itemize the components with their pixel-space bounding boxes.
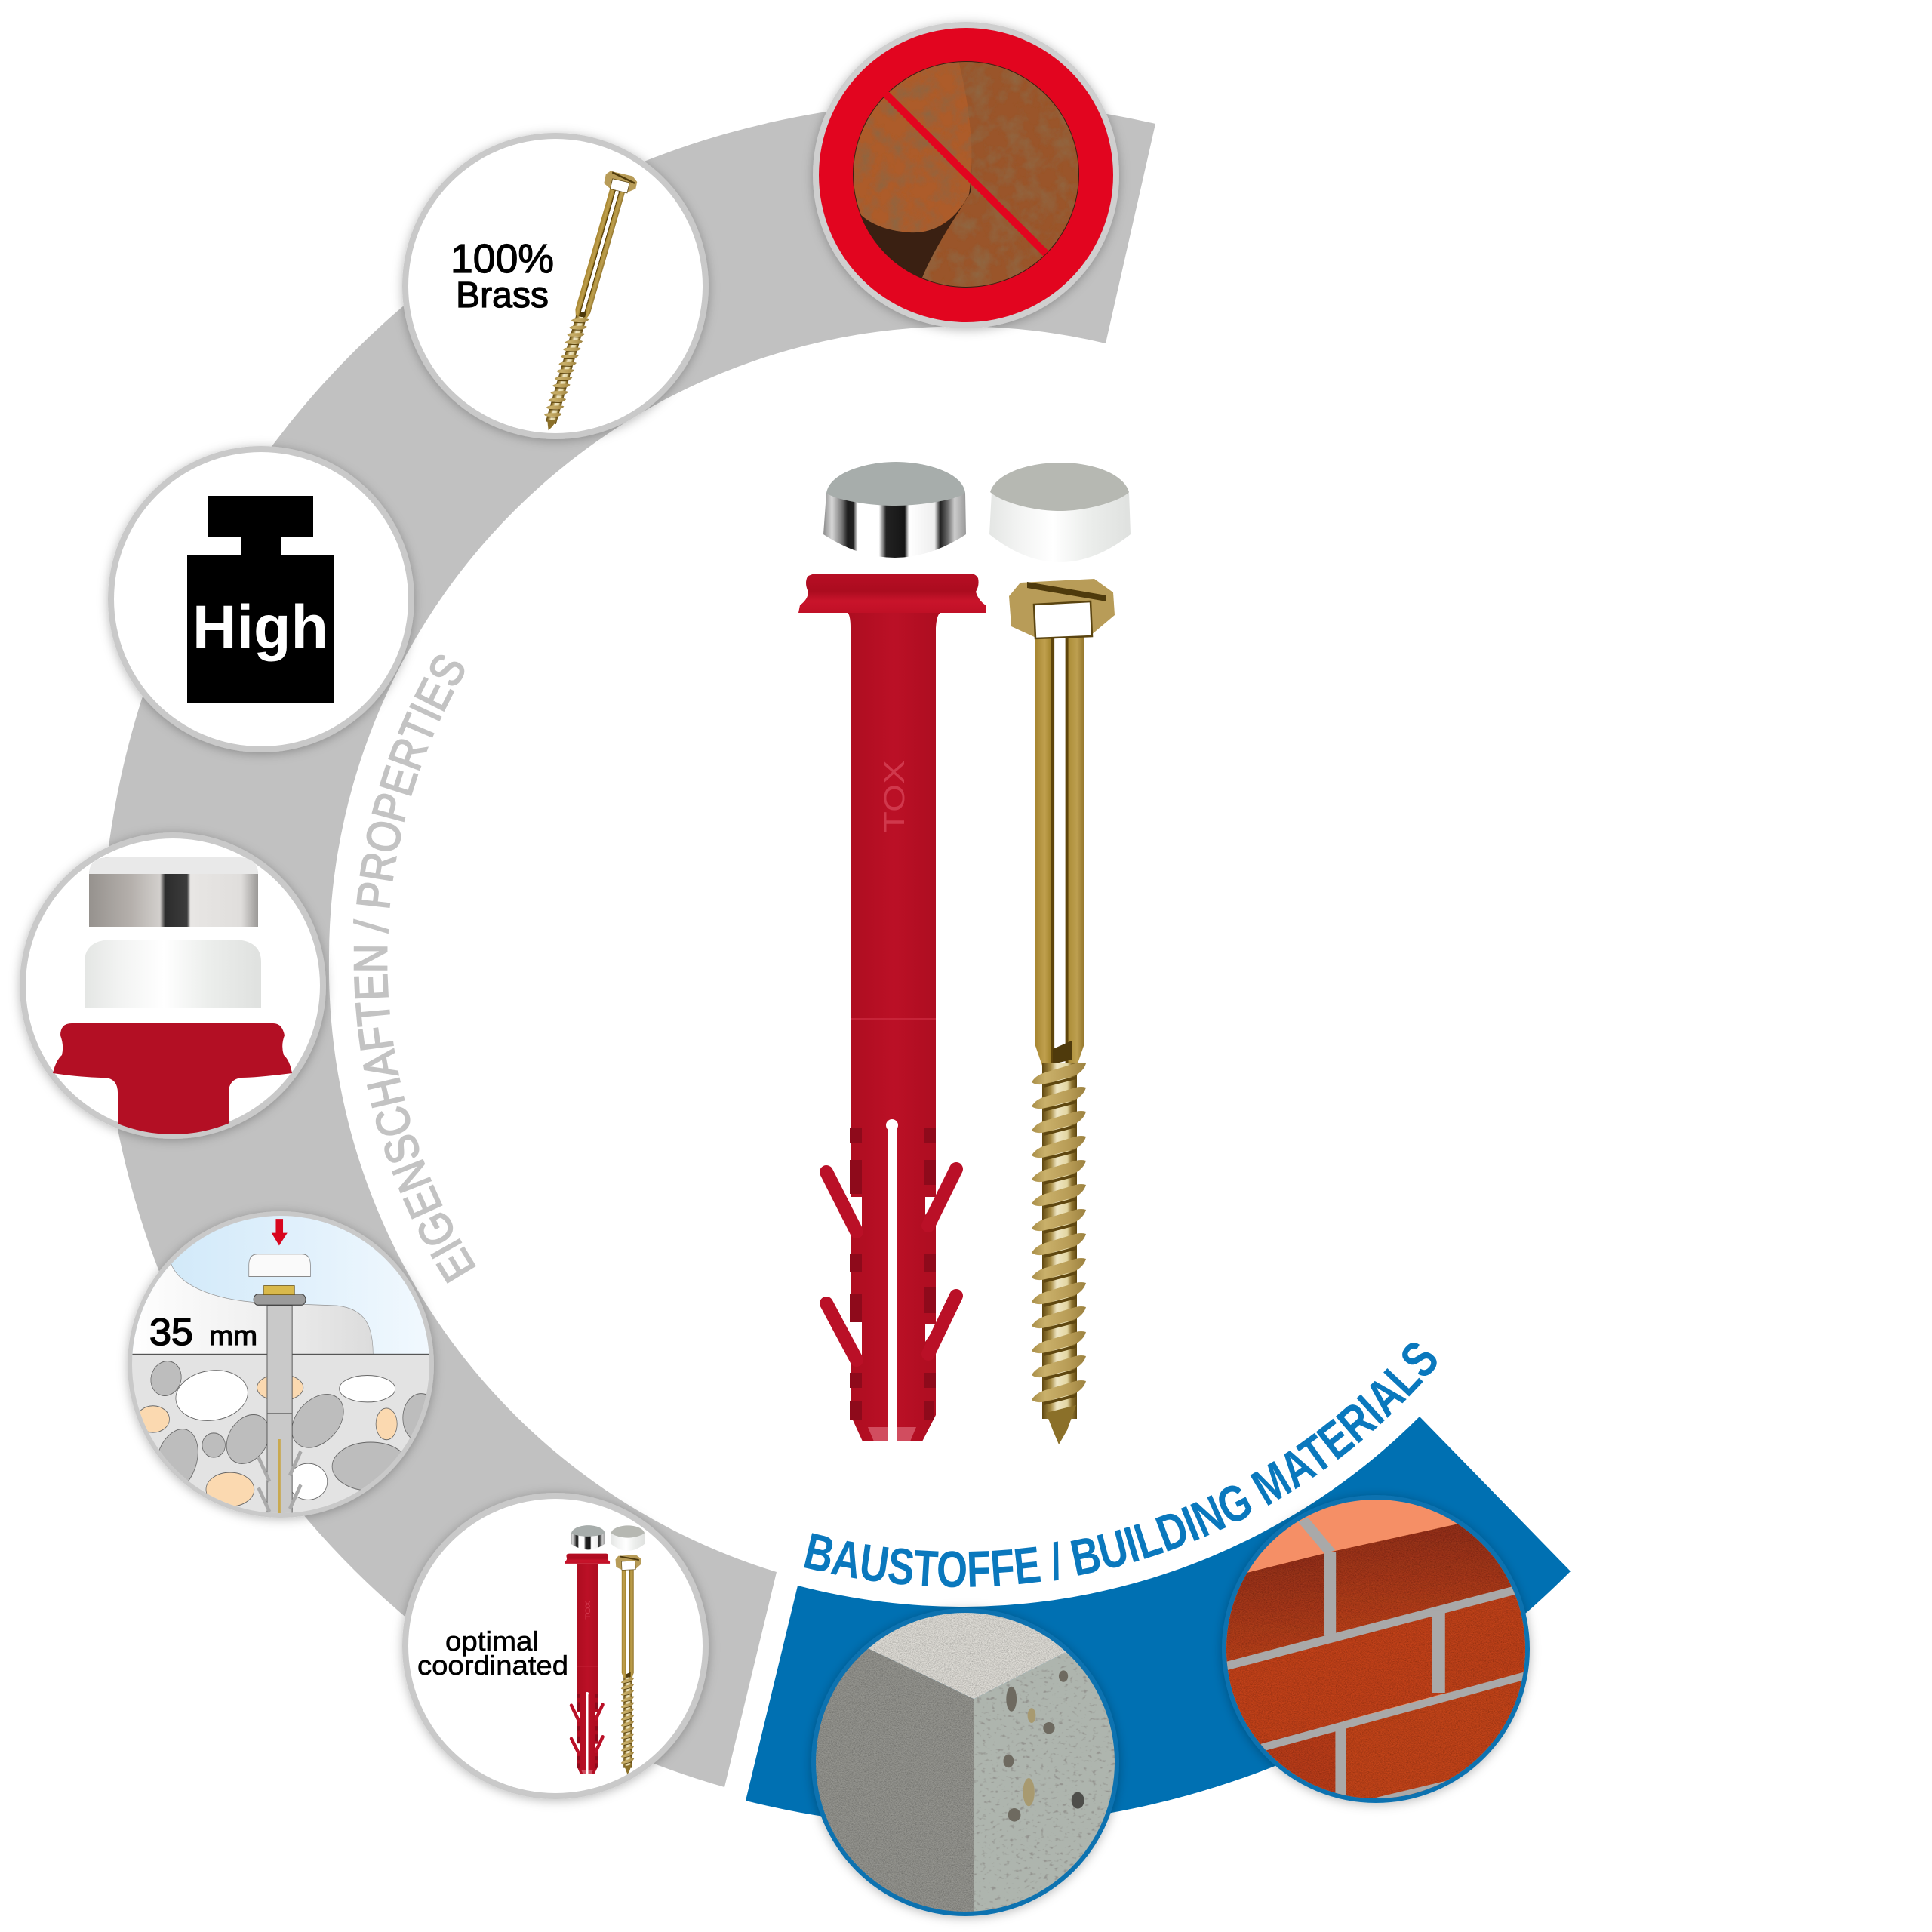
illustration: product set of caps, dowel and screw <box>798 462 1131 1444</box>
icon: weight <box>187 496 334 703</box>
panel: cap options badge <box>20 832 326 1140</box>
infographic canvas <box>14 17 1571 1924</box>
text: coordinated: coordinated <box>417 1650 568 1681</box>
panel: concrete material <box>804 1601 1133 1929</box>
panel: blue building materials band <box>746 1417 1571 1827</box>
heading: building materials curved label: BAUSTOFFE / BUILDING MATERIALS <box>804 1343 1437 1588</box>
text: 35 mm: 35 <box>149 1311 193 1353</box>
text: 35 mm <box>150 1318 257 1346</box>
icon: no rust badge <box>813 22 1119 328</box>
text: Brass: Brass <box>456 275 549 315</box>
panel: optimally coordinated badge <box>402 1493 709 1799</box>
panel: 35 mm embedding illustration <box>126 1211 439 1524</box>
icon: high load weight badge <box>108 446 414 752</box>
icon: brass screw badge <box>402 133 709 439</box>
text: 35 mm: mm <box>209 1320 257 1351</box>
icon: installed dowel <box>254 1286 306 1521</box>
icon: red dowel head <box>53 1023 292 1140</box>
icon: brass screw <box>534 169 638 435</box>
text: High: High <box>192 593 328 662</box>
icon: white cap <box>249 1254 310 1276</box>
icon: mini product set <box>565 1525 645 1774</box>
panel: gray properties arc <box>101 101 1155 1787</box>
heading: properties curved label: EIGENSCHAFTEN / PROPERTIES <box>353 655 476 1284</box>
text: optimal: optimal <box>445 1626 539 1657</box>
icon: white cap <box>85 940 261 1008</box>
text: 100%: 100% <box>451 236 554 281</box>
panel: brick material <box>1214 1490 1537 1809</box>
icon: chrome cap <box>89 857 258 927</box>
arrow: press down <box>272 1219 288 1246</box>
